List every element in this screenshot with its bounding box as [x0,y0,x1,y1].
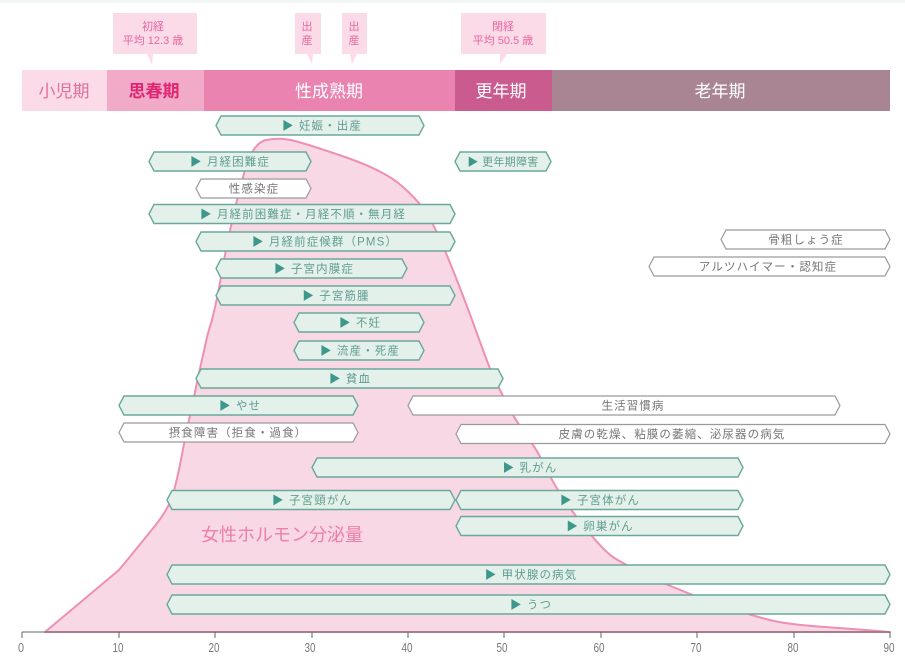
bar: underweight: ▶ やせ [219,400,261,412]
bar: breast cancer [312,458,743,477]
bar: ovarian cancer [456,516,743,536]
callout: childbirth 2 [342,13,367,64]
bar: lifestyle diseases: 生活習慣病 [602,398,664,412]
bar: Alzheimer and dementia [649,257,890,276]
stage: puberty [107,70,204,111]
stage: puberty: 思春期 [128,82,180,101]
age axis: 60 [594,640,604,655]
stage: reproductive age: 性成熟期 [295,82,363,101]
bar: miscarriage and stillbirth [294,341,424,360]
bar: uterine body cancer: ▶ 子宮体がん [560,493,640,507]
bar: sexually transmitted infections [196,179,311,198]
callout: menopause [461,13,546,64]
callout: menarche [113,13,197,65]
bar: eating disorders [119,423,358,442]
bar: dysmenorrhea: ▶ 月経困難症 [190,154,270,168]
bar: uterine body cancer [456,490,743,510]
bar: osteoporosis [721,230,890,249]
bar: anemia: ▶ 貧血 [329,372,371,386]
stage: reproductive age [204,70,455,111]
bar: lifestyle diseases [408,396,840,415]
bar: pregnancy and childbirth: ▶ 妊娠・出産 [282,118,362,132]
bar: endometriosis [216,259,407,278]
bar: pregnancy and childbirth [216,116,424,135]
bar: menstrual disorders: ▶ 月経前困難症・月経不順・無月経 [200,207,406,221]
bar: dryness and atrophy [456,424,890,444]
hormone curve label: 女性ホルモン分泌量 [201,525,363,545]
bar: Alzheimer and dementia: アルツハイマー・認知症 [699,260,837,274]
bar: thyroid disease: ▶ 甲状腺の病気 [485,568,577,582]
bar: infertility [294,313,424,332]
life stage band [22,70,890,111]
age axis: 0 [18,640,24,655]
callout: menopause: 閉経 [492,20,514,33]
bar: ovarian cancer: ▶ 卵巣がん [566,519,634,533]
age axis: 10 [112,640,124,655]
bar: infertility: ▶ 不妊 [339,316,381,330]
bar: depression: ▶ うつ [510,598,552,612]
bar: menopausal disorder [455,152,551,171]
bar: uterine fibroids [216,286,455,305]
bar: PMS [196,232,455,251]
bar: menstrual disorders [149,204,455,224]
age axis: 20 [208,640,220,655]
bar: eating disorders: 摂食障害（拒食・過食） [169,426,307,440]
stage: menopause [455,70,552,111]
callout: childbirth 2: 産 [348,33,360,47]
callout: childbirth 1: 産 [302,33,312,47]
stage: old age [552,70,890,111]
bar: menopausal disorder: ▶ 更年期障害 [467,154,539,168]
age axis: 80 [788,640,798,655]
bar: underweight [119,396,358,415]
bar: endometriosis: ▶ 子宮内膜症 [274,262,354,276]
hormone secretion curve [45,139,890,632]
age axis: 30 [304,640,316,655]
bar: osteoporosis: 骨粗しょう症 [768,234,844,246]
callout: menarche: 初経 [142,20,164,33]
bar: miscarriage and stillbirth: ▶ 流産・死産 [320,344,400,358]
bar: breast cancer: ▶ 乳がん [503,460,557,474]
bar: dryness and atrophy: 皮膚の乾燥、粘膜の萎縮、泌尿器の病気 [559,427,785,441]
stage: childhood [22,70,107,111]
bar: uterine fibroids: ▶ 子宮筋腫 [302,288,370,302]
bar: cervical cancer [167,490,455,510]
stage: menopause: 更年期 [476,82,526,101]
age axis: 50 [496,640,508,655]
bar: anemia [196,369,503,388]
bar: cervical cancer: ▶ 子宮頸がん [272,493,352,507]
bar: thyroid disease [167,565,890,584]
stage: childhood: 小児期 [38,82,90,101]
callout: childbirth 1 [295,13,321,64]
age axis: 40 [402,640,412,655]
bar: depression [167,595,890,614]
bar: PMS: ▶ 月経前症候群（PMS） [252,234,398,248]
callout: childbirth 2: 出 [348,20,360,33]
callout: menarche: 平均 12.3 歳 [123,33,183,47]
age axis: 70 [690,640,702,655]
callout: childbirth 1: 出 [302,20,312,33]
age axis: 90 [884,640,894,655]
callout: menopause: 平均 50.5 歳 [473,33,533,47]
bar: sexually transmitted infections: 性感染症 [229,182,279,196]
stage: old age: 老年期 [694,82,746,101]
bar: dysmenorrhea [149,152,311,171]
age axis [18,632,894,655]
